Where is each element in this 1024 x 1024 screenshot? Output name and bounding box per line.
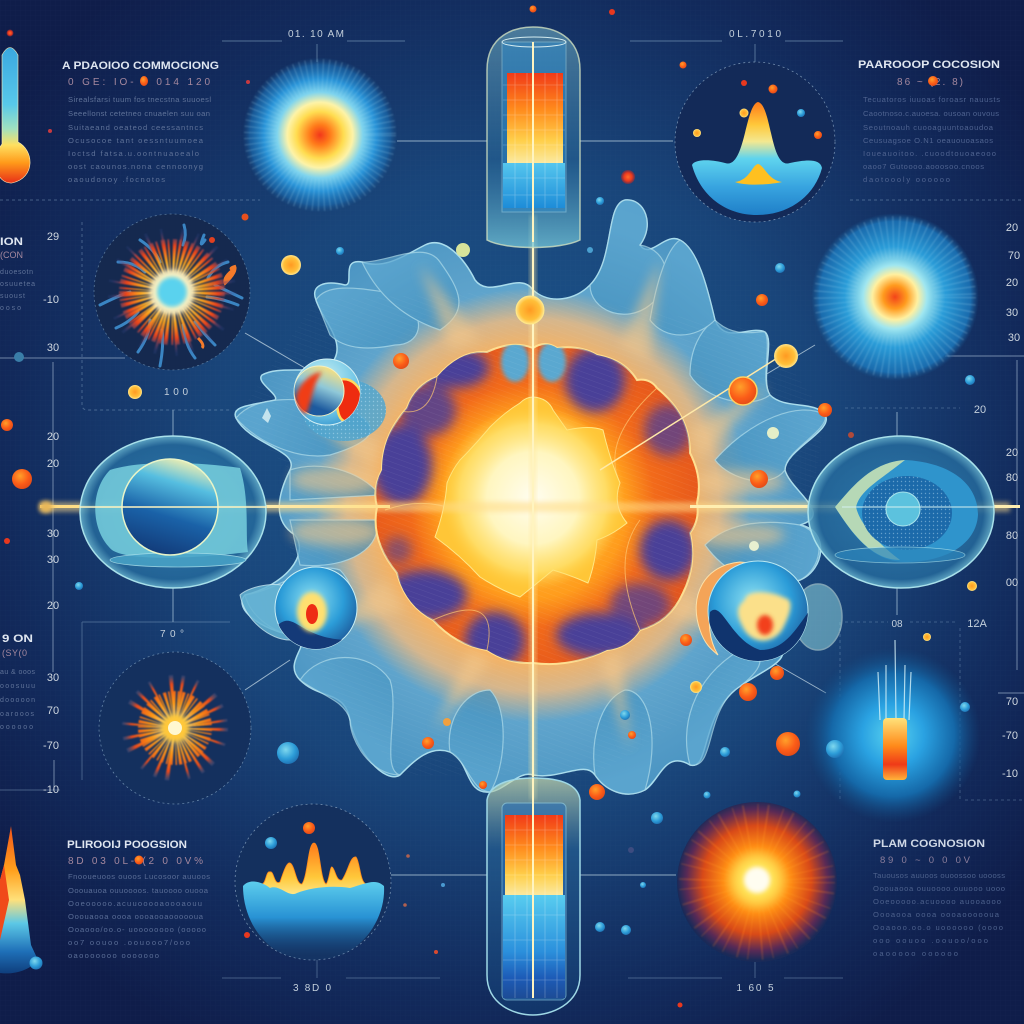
sphere xyxy=(122,459,218,555)
spiky circle: left xyxy=(94,214,250,370)
caption labels: 20 xyxy=(974,404,986,416)
body: Oooaooa oooa oooaoooooua xyxy=(873,910,1000,919)
cold band xyxy=(503,895,565,998)
inner ball xyxy=(294,366,344,416)
title block: top right xyxy=(858,59,1000,184)
scale labels: right: 00 xyxy=(1006,577,1018,589)
star sparkle xyxy=(262,408,271,423)
sun: top left xyxy=(242,57,398,213)
body: Ooaooo.oo.o uoooooo (oooo xyxy=(873,923,1003,932)
body: Ceusuagsoe O.N1 oeauouoasaos xyxy=(863,136,993,145)
body: oaoo7 Gutoooo.aooosoo.cnoos xyxy=(863,162,984,171)
petal base xyxy=(235,200,826,794)
fragment block: left upper: (CON xyxy=(0,250,23,260)
body: Caootnoso.c.auoesa. ousoan ouvous xyxy=(863,109,999,118)
scale labels: left: 30 xyxy=(47,554,59,566)
scale labels: right: 70 xyxy=(1008,250,1020,262)
fragment block: left lower: au & ooos xyxy=(0,669,36,676)
bottom disc xyxy=(835,547,965,563)
fragment block: left upper: osuuetea xyxy=(0,281,35,288)
cream rays xyxy=(290,260,785,750)
spiky circle: lower left xyxy=(99,652,251,804)
inner pale block xyxy=(95,463,248,558)
body: Tauousos auuoos ouoossoo uoooss xyxy=(873,871,1005,880)
scale labels: left: 20 xyxy=(47,458,59,470)
central plasma: outer translucent petals xyxy=(235,200,826,794)
fragment block: left upper: ooso xyxy=(0,305,21,312)
inner xyxy=(502,803,566,1000)
title block: top right: 86 ~ (2. 8) xyxy=(897,77,963,88)
scale labels: right: 30 xyxy=(1006,307,1018,319)
red bulb dot xyxy=(6,30,14,36)
capsule xyxy=(883,718,907,780)
scale labels: right: 80 xyxy=(1006,472,1018,484)
cell body xyxy=(240,585,290,640)
body: ooo oouoo .oouoo/ooo xyxy=(873,936,988,945)
orange dot xyxy=(134,856,144,864)
body: Fnooueuoos ouoos Lucosoor auuoos xyxy=(68,872,210,881)
fragment block: left upper xyxy=(0,236,35,312)
left capsule xyxy=(80,436,266,588)
small cell: lower right xyxy=(696,561,842,670)
body: Ooeooooo.acuuooooaoooaouu xyxy=(68,899,202,908)
bottom disc xyxy=(110,553,246,567)
scale labels: right: 20 xyxy=(1006,447,1018,459)
title block: top left: A PDAOIOO COMMOCIONG xyxy=(62,60,219,72)
fragment block: left lower: oarooos xyxy=(0,711,34,718)
body: Ioueauoitoo. .cuoodtouoaeooo xyxy=(863,149,996,158)
scale labels: right: -70 xyxy=(1002,730,1018,742)
body: Ooeooooo.acuoooo auooaooo xyxy=(873,897,1001,906)
scale labels: left: -70 xyxy=(43,740,59,752)
yellow star xyxy=(435,397,627,597)
nucleus sphere xyxy=(886,492,920,526)
scale labels: right: -10 xyxy=(1002,768,1018,780)
white glow xyxy=(441,406,625,590)
body: Ooouauoa ouuoooos. tauoooo ouooa xyxy=(68,886,209,895)
body: Ooaooo/oo.o- uoooooooo (ooooo xyxy=(68,925,206,934)
inner body xyxy=(835,460,978,562)
scale labels: right: 20 xyxy=(1006,222,1018,234)
body: Seeellonst cetetneo cnuaelen suu oan xyxy=(68,109,210,118)
blue sphere xyxy=(30,956,42,970)
orange crescent xyxy=(696,562,750,655)
scale labels: left xyxy=(43,231,59,796)
fragment block: left lower: dooooon xyxy=(0,697,35,704)
scale labels: left: 29 xyxy=(47,231,59,243)
fragment block: left upper: suoust xyxy=(0,293,25,300)
caption labels: 3 8D 0 xyxy=(293,983,331,994)
body: Ooouaooa oooa oooaooaoooooua xyxy=(68,912,204,921)
dotted nucleus xyxy=(862,476,952,550)
scale labels: right: 70 xyxy=(1006,696,1018,708)
beams xyxy=(39,215,1020,800)
fragment block: left upper: ION xyxy=(0,236,23,248)
dots xyxy=(740,108,748,118)
caption labels xyxy=(160,29,987,994)
caption labels: 1 60 5 xyxy=(736,983,774,994)
orange blob xyxy=(375,344,699,664)
flame icon: bottom left xyxy=(0,826,42,973)
body: oaooooooo ooooooo xyxy=(68,951,159,960)
body: Ioctsd fatsa.u.oontnuaoealo xyxy=(68,149,199,158)
body: Sirealsfarsi tuum fos tnecstna suuoesl xyxy=(68,95,211,104)
caption labels: 70° xyxy=(160,629,184,640)
title block: bottom right: 89 0 ~ 0 0 0V xyxy=(880,855,971,866)
halo disc xyxy=(302,379,386,441)
title block: bottom right: PLAM COGNOSION xyxy=(873,838,985,850)
thermometer icon xyxy=(0,30,30,183)
body xyxy=(68,872,210,960)
right crescent xyxy=(337,379,362,421)
caption labels: 100 xyxy=(164,387,188,398)
body: Seoutnoauh cuooaguuntoaoudoa xyxy=(863,123,994,132)
body: Ocusocoe tant oessntuumoea xyxy=(68,136,204,145)
caption labels: 0L.7010 xyxy=(729,29,781,40)
title block: top left: 0 GE: IO- 0 014 120 xyxy=(68,77,210,88)
back ellipse xyxy=(794,584,842,650)
body: oaoudonoy .focnotos xyxy=(68,175,165,184)
fragment block: left lower: oooooo xyxy=(0,724,33,731)
scale labels: left: 30 xyxy=(47,528,59,540)
body: Ooouaooa ouuoooo.ouuooo uooo xyxy=(873,884,1005,893)
sphere xyxy=(294,359,360,425)
hatch texture xyxy=(236,290,825,775)
scale labels: left: 20 xyxy=(47,431,59,443)
inner xyxy=(502,42,566,212)
fragment block: left lower: ooosuuu xyxy=(0,683,35,690)
body xyxy=(68,95,211,184)
fragment block: left upper: duoesotn xyxy=(0,269,33,276)
body: Suitaeand oeateod ceessantncs xyxy=(68,123,203,132)
sun: right xyxy=(811,213,979,381)
caption labels: 12A xyxy=(967,618,987,630)
purple patches xyxy=(370,340,700,670)
caption labels: 01. 10 AM xyxy=(288,29,344,40)
outer shell xyxy=(80,436,266,588)
cold band xyxy=(503,163,565,208)
dots xyxy=(303,822,315,834)
outer shell xyxy=(808,436,994,588)
title block: top left xyxy=(62,60,219,184)
sphere xyxy=(708,561,808,661)
body xyxy=(873,871,1005,958)
caption labels: 08 xyxy=(891,619,903,630)
scale labels: left: 20 xyxy=(47,600,59,612)
central core xyxy=(370,340,700,670)
scale labels: left: 30 xyxy=(47,342,59,354)
body: oo7 oouoo .oouooo7/ooo xyxy=(68,938,190,947)
body: oost caounos.nona cennoonyg xyxy=(68,162,203,171)
small cell: upper left xyxy=(262,359,386,441)
scale labels: right: 30 xyxy=(1008,332,1020,344)
cylinder: top xyxy=(487,27,580,248)
cylinder: bottom xyxy=(487,778,580,1015)
scale labels: left: 30 xyxy=(47,672,59,684)
blue lobes xyxy=(236,200,825,794)
hot band xyxy=(507,73,563,163)
scale labels: left: -10 xyxy=(43,784,59,796)
sun with capsule: lower right xyxy=(805,640,981,823)
title block: bottom left: PLIROOIJ POOGSION xyxy=(67,839,187,851)
dome chart: top right xyxy=(675,62,835,222)
body: Tecuatoros iuuoas foroasr nauusts xyxy=(863,95,1000,104)
scale labels: right: 80 xyxy=(1006,530,1018,542)
body: daotoooly oooooo xyxy=(863,175,950,184)
title block: top right: PAAROOOP COCOSION xyxy=(858,59,1000,71)
title block: bottom right xyxy=(873,838,1005,958)
body xyxy=(863,95,1000,184)
right capsule xyxy=(808,436,994,588)
scale labels: right: 20 xyxy=(1006,277,1018,289)
fragment block: left lower: 9 ON xyxy=(2,633,33,645)
bowl chart: bottom centre left xyxy=(235,804,391,962)
scale labels: right xyxy=(1002,222,1020,780)
scale labels: left: 70 xyxy=(47,705,59,717)
shell xyxy=(487,778,580,1015)
scale labels: left: -10 xyxy=(43,294,59,306)
orange dot xyxy=(928,76,938,86)
hot band xyxy=(505,815,563,895)
burst: bottom right xyxy=(677,802,837,962)
beam end left xyxy=(39,501,53,513)
body: oaooooo oooooo xyxy=(873,949,958,958)
orange dot xyxy=(140,76,148,86)
small cell: lower left xyxy=(240,567,357,660)
fragment block: left lower xyxy=(0,633,36,731)
title block: bottom left xyxy=(67,839,210,960)
fragment block: left lower: (SY(0 xyxy=(2,648,27,658)
title block: bottom left: 8D 03 0L- (2 0 0V% xyxy=(68,856,203,867)
shell xyxy=(487,27,580,248)
